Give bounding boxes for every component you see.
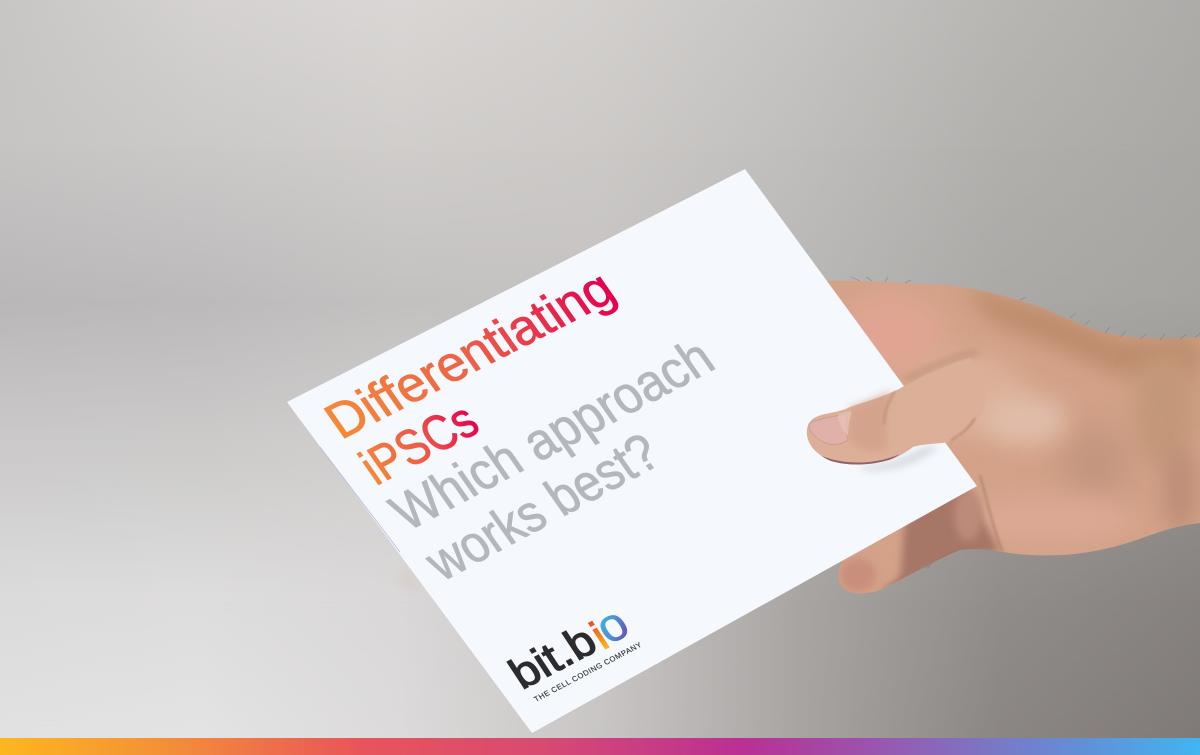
logo: bit.bio: o bbox=[586, 598, 639, 654]
heading: Differentiating iPSCs: iPSCs bbox=[350, 392, 489, 496]
subheading: Which approach works best?: works best? bbox=[414, 423, 671, 592]
card: white postcard bbox=[287, 169, 977, 733]
thumb shadow on card bbox=[862, 447, 940, 471]
logo: bit.bio bbox=[501, 598, 643, 704]
gradient footer bar bbox=[0, 738, 1200, 755]
logo: bit.bio: i bbox=[582, 614, 616, 658]
palm under thumb bbox=[923, 356, 1018, 436]
knuckle crease bbox=[884, 391, 895, 424]
tagline: THE CELL CODING COMPANY bbox=[532, 640, 643, 704]
hand: palm, back of hand and fingers bbox=[827, 276, 1200, 594]
logo: bit.bio: bit.b bbox=[501, 617, 605, 698]
thumb tip shading bbox=[848, 391, 892, 451]
thumbnail bbox=[809, 414, 848, 445]
hair on back of hand bbox=[851, 277, 1200, 340]
thumb upper ridge bbox=[905, 352, 978, 380]
subheading: Which approach works best?: Which approach bbox=[379, 328, 725, 542]
thumb over card bbox=[807, 358, 986, 465]
reflection under card bbox=[398, 565, 420, 590]
thumb crease bbox=[950, 418, 975, 441]
heading: Differentiating iPSCs: Differentiating bbox=[315, 260, 626, 450]
